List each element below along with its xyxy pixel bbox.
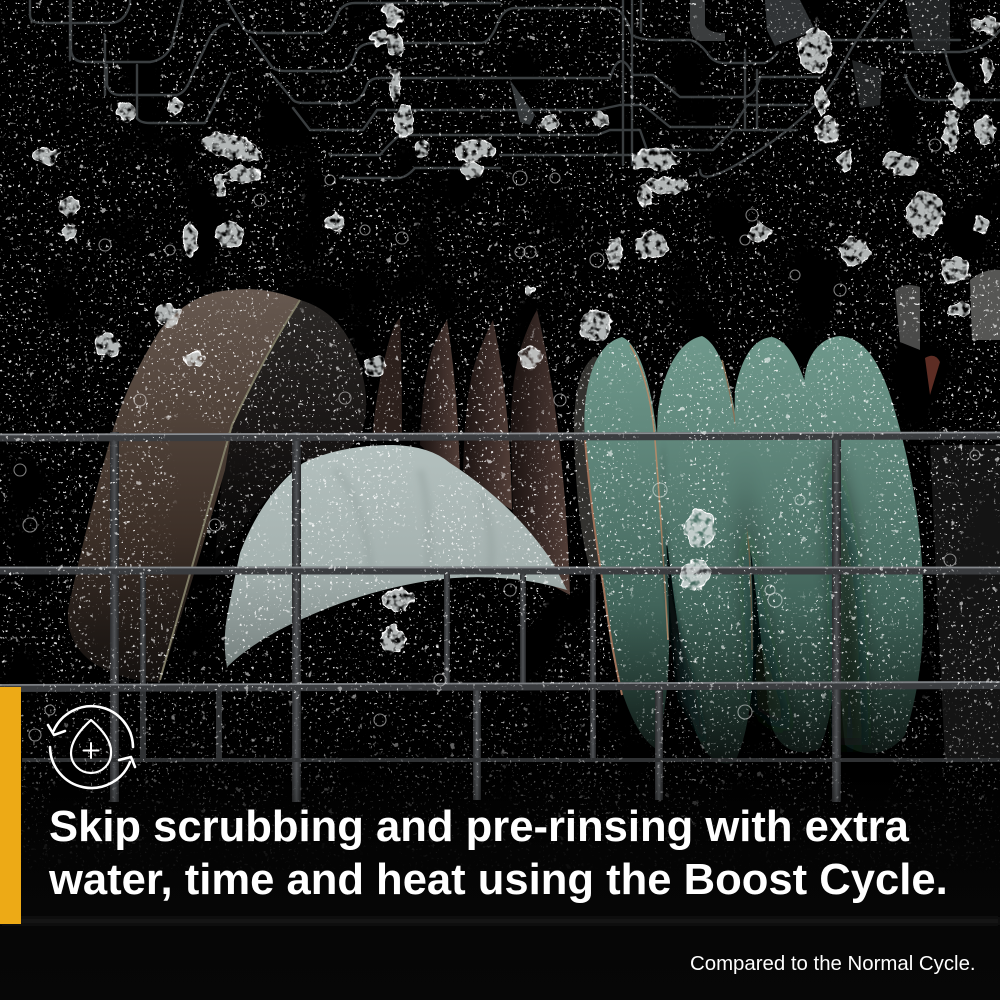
large water splashes bbox=[32, 3, 999, 653]
plate: green 1 bbox=[584, 337, 669, 748]
caption lighter band bbox=[0, 917, 1000, 925]
headline bbox=[48, 803, 948, 904]
brown plates behind bowl bbox=[372, 310, 570, 595]
headline: Skip scrubbing and pre-rinsing with extra bbox=[49, 803, 909, 851]
bottom fade behind caption bbox=[0, 770, 1000, 1000]
dark inside of the baking dish bbox=[215, 300, 366, 560]
plate: green 3 bbox=[735, 337, 836, 752]
small bubble rings bbox=[14, 139, 980, 741]
dispenser and utensil shapes in upper rack bbox=[510, 0, 950, 125]
lower rack vertical wires bbox=[110, 432, 841, 802]
lower rack horizontal wires bbox=[0, 432, 1000, 760]
headline: water, time and heat using the Boost Cycle. bbox=[49, 856, 948, 904]
yellow accent bar bbox=[0, 687, 21, 924]
plate: green 4 bbox=[804, 336, 923, 753]
white ceramic bowl bbox=[225, 445, 567, 667]
plate: dark plate behind green plates bbox=[574, 356, 610, 570]
icon: water drop with plus in cycle arrows bbox=[46, 704, 136, 790]
plate: green 2 bbox=[657, 336, 753, 763]
footnote: Compared to the Normal Cycle. bbox=[690, 953, 976, 975]
upper dish rack wires bbox=[30, 0, 1000, 178]
brown baking dish bbox=[68, 289, 300, 682]
right rack shadow and small utensils bbox=[895, 270, 1000, 760]
